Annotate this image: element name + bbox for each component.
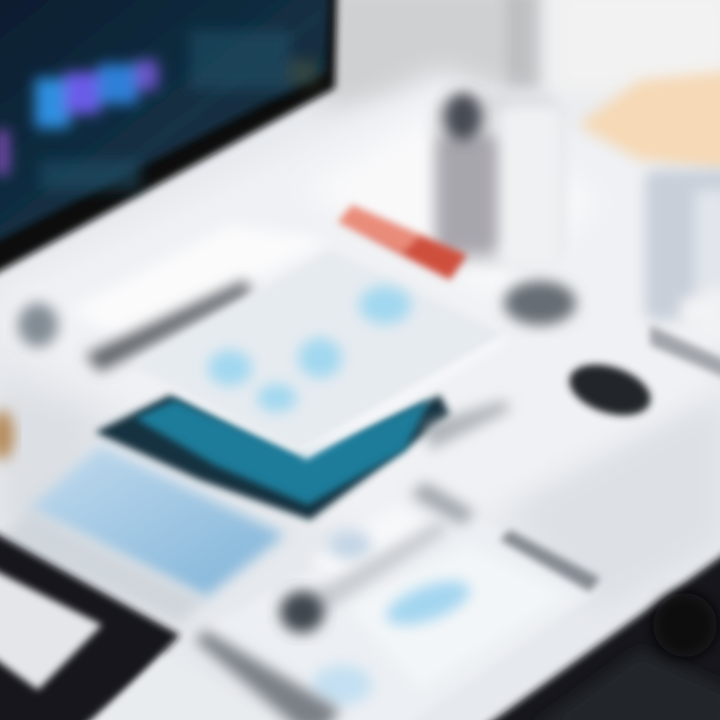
white pad and pen <box>18 225 330 372</box>
peach lamp glow <box>578 70 720 172</box>
bottom left tablet <box>0 530 180 720</box>
red marker <box>338 205 467 280</box>
tablet <box>132 250 505 460</box>
tablet blue spots <box>208 286 411 412</box>
small grey clip near cup <box>504 281 576 325</box>
grey bar <box>500 530 600 592</box>
left edge orange item <box>0 410 14 460</box>
pen on papers <box>300 520 448 615</box>
cylinder cup <box>432 93 564 270</box>
light blue sheet <box>0 445 285 625</box>
lower right desk strip <box>510 395 720 610</box>
monitor <box>0 0 337 282</box>
bottom papers <box>80 482 600 720</box>
right cup <box>645 170 720 380</box>
paper blue highlights <box>312 530 475 705</box>
monitor screen chart glow <box>0 30 318 190</box>
black oval object <box>563 355 657 425</box>
pen by the tablet <box>425 400 510 450</box>
teal book <box>95 395 450 520</box>
bottom right dark corner <box>480 550 720 720</box>
